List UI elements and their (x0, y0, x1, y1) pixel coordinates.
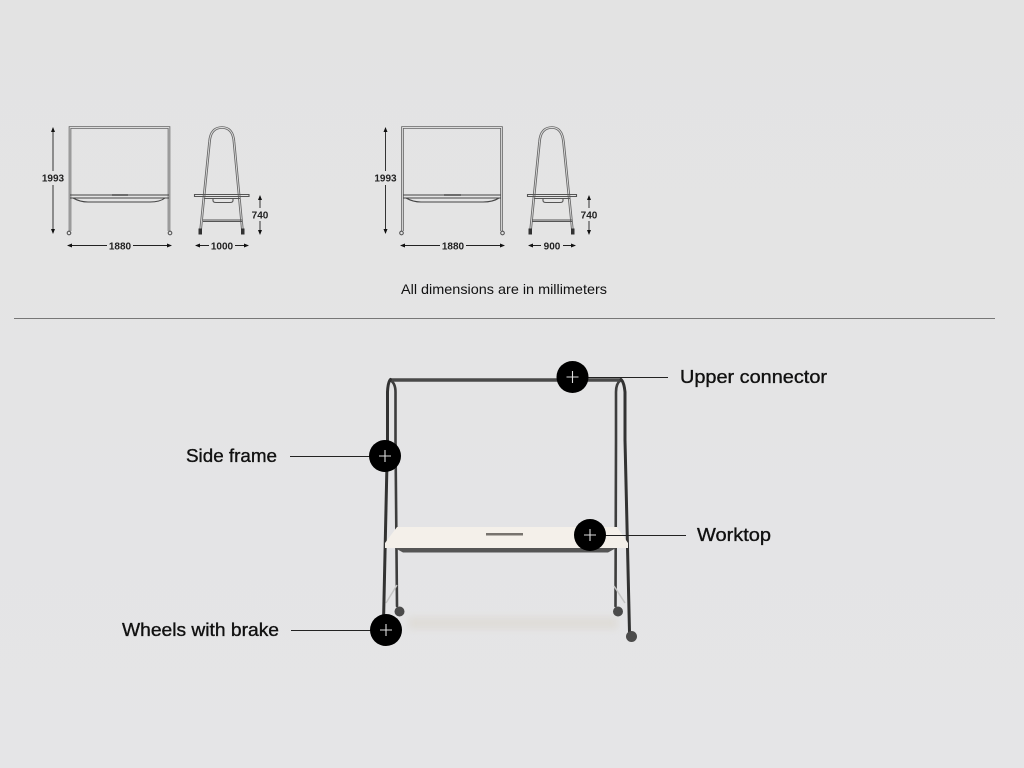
dimension: worktop height 740: 740 (252, 210, 269, 222)
dimension: worktop height 740 (252, 195, 269, 235)
dimension: depth 1000: 1000 (211, 241, 234, 252)
label: Worktop (697, 525, 771, 545)
hotspot button (574, 519, 606, 551)
front view drawing (67, 128, 172, 235)
side view drawing (194, 128, 249, 234)
wheels (394, 606, 637, 642)
braces (386, 585, 625, 603)
label: Side frame (186, 446, 277, 466)
panel: dimension drawings, 900 mm deep model (374, 127, 598, 252)
hotspot button (556, 361, 588, 393)
dimension: worktop height 740 (581, 195, 598, 235)
panel: dimension drawings, 1000 mm deep model (42, 127, 269, 252)
near legs (384, 380, 630, 632)
label: Wheels with brake (122, 620, 279, 640)
floor shadow (408, 617, 618, 629)
product illustration: mobile table (384, 380, 637, 642)
hotspot button (370, 614, 402, 646)
hotspot button (369, 440, 401, 472)
dimension: worktop height 740: 740 (581, 210, 598, 222)
dimension: depth 900 (528, 241, 576, 252)
upper connector bar (390, 378, 621, 382)
dimension: width 1880: 1880 (109, 241, 132, 252)
callout: side frame (186, 440, 401, 472)
dimension: width 1880 (400, 241, 505, 252)
label: Upper connector (680, 367, 827, 387)
worktop (385, 527, 628, 552)
front view drawing (400, 128, 504, 235)
dimension: height 1993: 1993 (374, 174, 397, 184)
callout: wheels with brake (122, 614, 402, 646)
dimension: height 1993: 1993 (42, 174, 65, 184)
callout: worktop (574, 519, 771, 551)
dimension: height 1993 (374, 127, 397, 234)
dimension: height 1993 (42, 127, 65, 234)
dimension: depth 1000 (195, 241, 249, 252)
far legs (390, 380, 621, 606)
dimension: width 1880 (67, 241, 172, 252)
callout: upper connector (556, 361, 827, 393)
units note: All dimensions are in millimeters (401, 281, 607, 297)
dimension: width 1880: 1880 (442, 241, 465, 252)
side view drawing (528, 128, 576, 234)
dimension: depth 900: 900 (544, 241, 561, 252)
